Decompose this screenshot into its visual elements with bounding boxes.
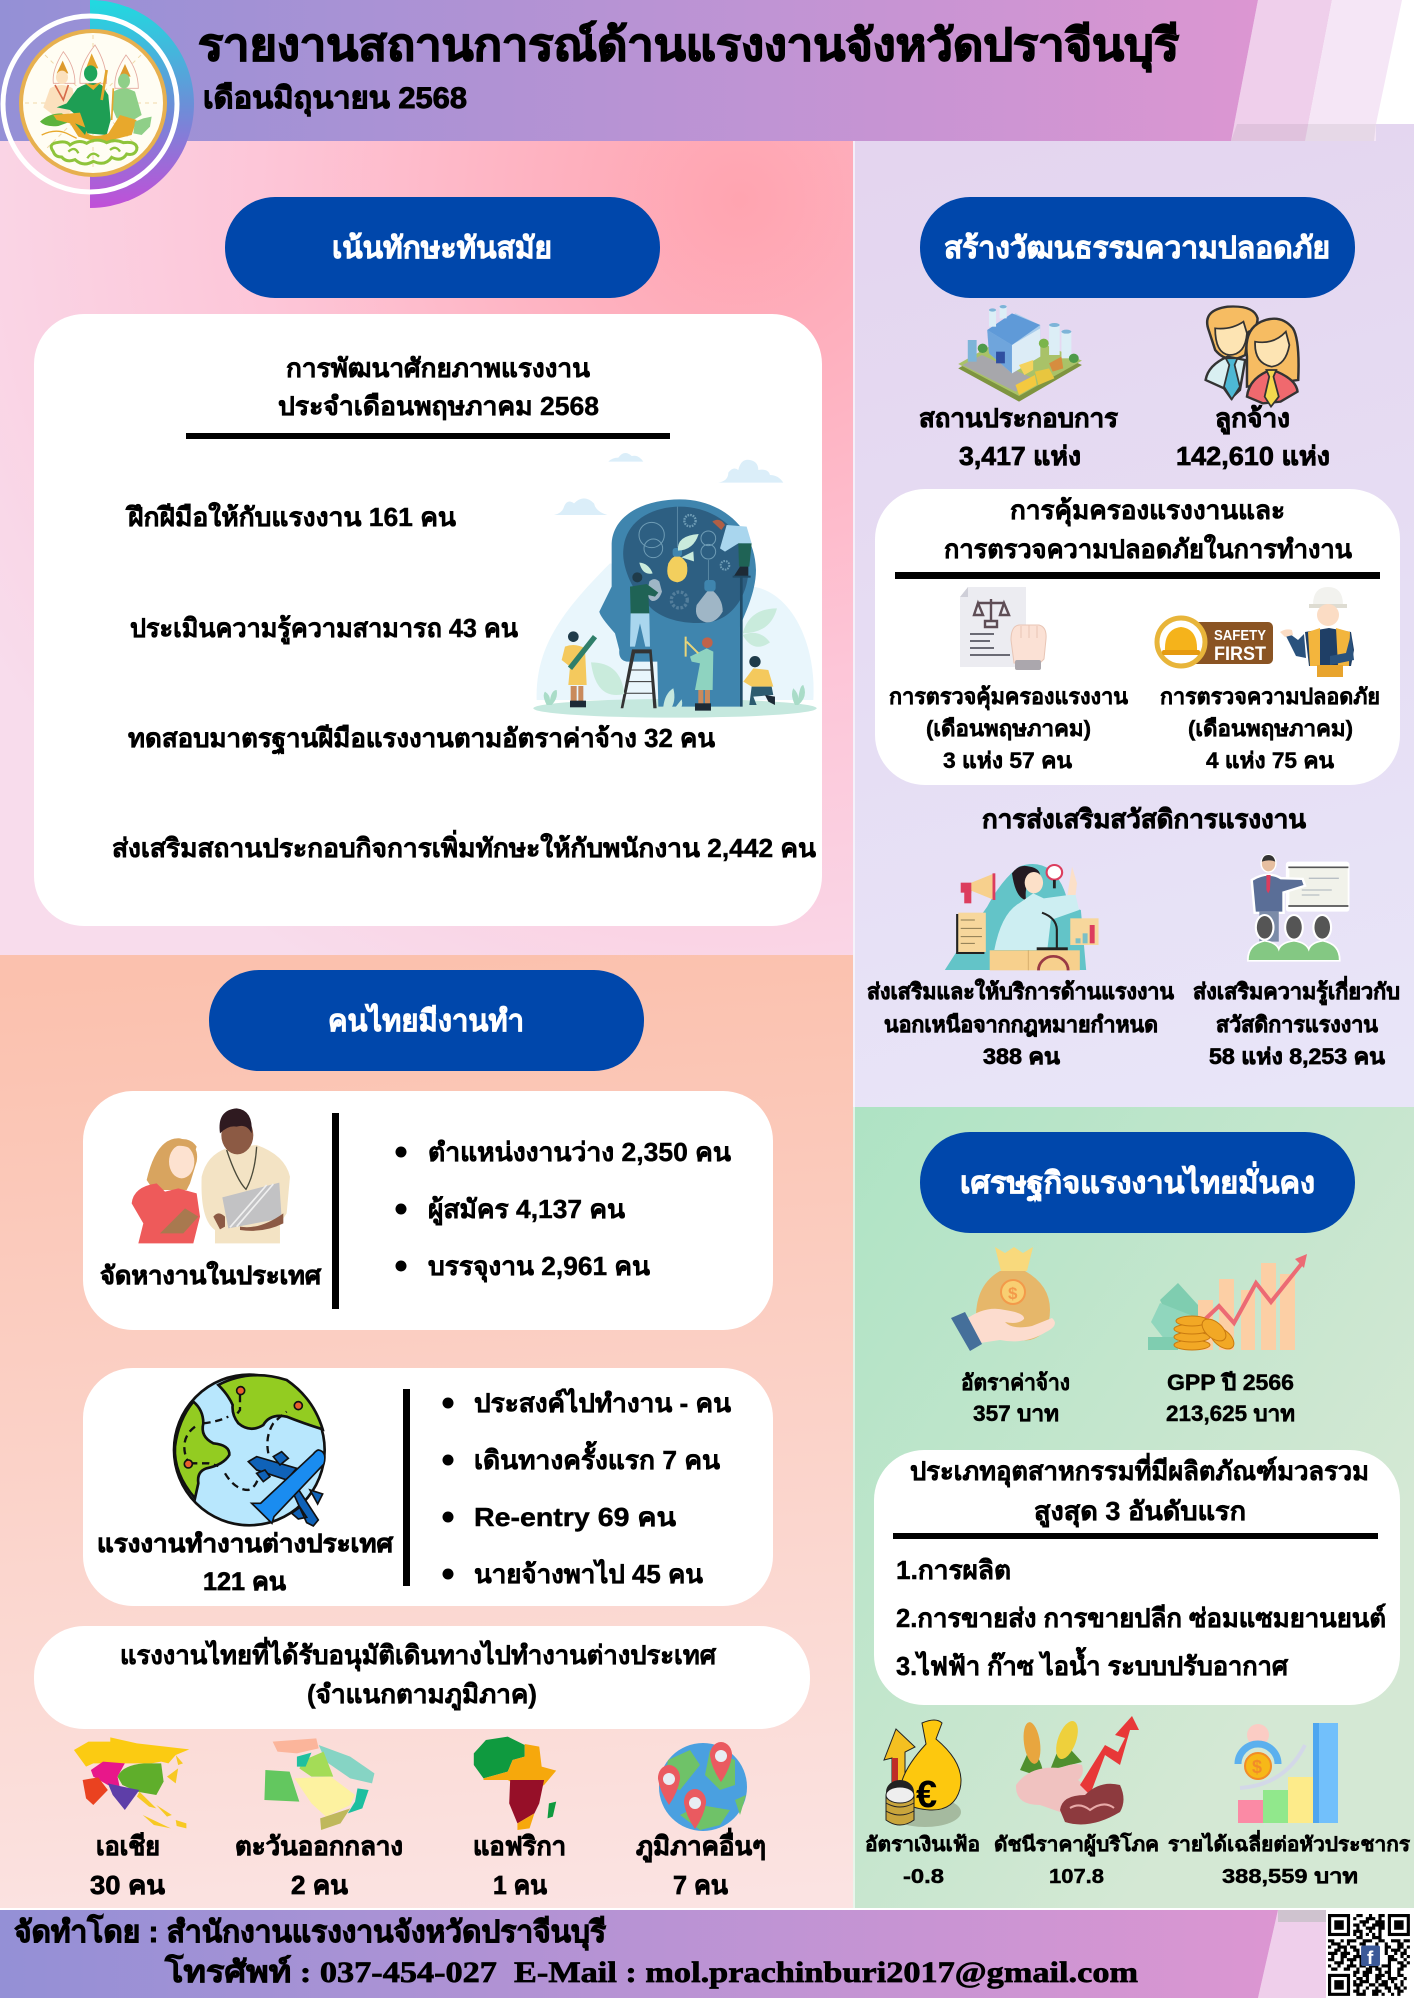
icon: asia map <box>74 1737 189 1828</box>
text: overseas workers label <box>97 1530 394 1596</box>
text: africa count: 1 คน <box>493 1870 547 1900</box>
text: welfare knowledge count: 58 แห่ง 8,253 คน <box>1209 1044 1385 1069</box>
logo emblem <box>3 0 194 208</box>
text: consumer price index: ดัชนีราคาผู้บริโภค <box>994 1832 1159 1858</box>
list: domestic job figures: บรรจุงาน 2,961 คน <box>428 1251 650 1283</box>
text: prepared by: จัดทำโดย : สำนักงานแรงงานจังหวัดปราจีนบุรี <box>14 1913 606 1951</box>
list: top 3 industries: 3.ไฟฟ้า ก๊าซ ไอน้ำ ระบบปรับอากาศ <box>896 1646 1288 1681</box>
text: middle east count: ตะวันออกกลาง <box>235 1831 403 1861</box>
text: consumer price index: 107.8 <box>1049 1866 1104 1888</box>
text: establishments: สถานประกอบการ <box>919 403 1118 433</box>
text: welfare knowledge count: สวัสดิการแรงงาน <box>1216 1012 1378 1037</box>
text: competency assessment: ประเมินความรู้ความสามารถ 43 คน <box>130 613 518 645</box>
text: income per capita: 388,559 บาท <box>1222 1866 1358 1888</box>
text: overseas workers label: 121 คน <box>203 1568 286 1596</box>
QR code: f <box>1367 1948 1374 1969</box>
QR code <box>1328 1916 1410 1994</box>
text: business upskilling: ส่งเสริมสถานประกอบกิจการเพิ่มทักษะให้กับพนักงาน 2,442 คน <box>112 829 816 863</box>
icon: globe with pins <box>658 1742 747 1831</box>
text: other regions count: 7 คน <box>673 1870 728 1900</box>
icon: globe with airplane <box>174 1375 325 1526</box>
text: income per capita <box>1168 1829 1410 1888</box>
panel: approved overseas workers heading: (จำแนกตามภูมิภาค) <box>307 1679 537 1711</box>
text: protection inspection count: การตรวจคุ้มครองแรงงาน <box>889 684 1128 711</box>
text: establishments: 3,417 แห่ง <box>959 441 1081 471</box>
panel: approved overseas workers heading <box>34 1626 810 1729</box>
text: panel heading line 2: ประจำเดือนพฤษภาคม 2568 <box>278 391 599 421</box>
text: wage rate: อัตราค่าจ้าง <box>961 1370 1070 1395</box>
panel: top 3 industries <box>874 1450 1400 1705</box>
text: welfare promotion heading: การส่งเสริมสวัสดิการแรงงาน <box>982 804 1306 834</box>
heading pill: thais employed: คนไทยมีงานทำ <box>328 1003 524 1038</box>
text: safety inspection count: (เดือนพฤษภาคม) <box>1188 716 1353 741</box>
text: employees: ลูกจ้าง <box>1215 403 1290 435</box>
text: protection heading <box>944 495 1352 564</box>
icon: safety worker <box>1280 587 1354 677</box>
icon: middle east map <box>264 1738 374 1830</box>
text: skills training: ฝึกฝีมือให้กับแรงงาน 161 คน <box>125 502 456 532</box>
text: other regions count <box>636 1827 766 1900</box>
text: domestic placement label: จัดหางานในประเทศ <box>100 1260 322 1290</box>
list: overseas figures: ประสงค์ไปทำงาน - คน <box>474 1387 731 1418</box>
text: safety inspection count: การตรวจความปลอดภัย <box>1160 684 1380 709</box>
text: welfare knowledge count: ส่งเสริมความรู้เกี่ยวกับ <box>1193 975 1400 1006</box>
list: domestic job figures: ตำแหน่งงานว่าง 2,350 คน <box>428 1137 731 1167</box>
list: overseas figures: นายจ้างพาไป 45 คน <box>474 1558 703 1589</box>
text: extra services count: ส่งเสริมและให้บริการด้านแรงงาน <box>867 978 1174 1004</box>
footer band <box>0 1908 1414 2000</box>
text: industries heading <box>910 1452 1369 1528</box>
text: establishments <box>919 403 1118 471</box>
text: asia count <box>90 1831 165 1900</box>
panel: skills development <box>34 314 822 926</box>
icon: factory isometric <box>958 305 1082 402</box>
text: skills standard test: ทดสอบมาตรฐานฝีมือแรงงานตามอัตราค่าจ้าง 32 คน <box>128 723 715 756</box>
text: industries heading: ประเภทอุตสาหกรรมที่มีผลิตภัณฑ์มวลรวม <box>910 1452 1369 1488</box>
text: inflation: อัตราเงินเฟ้อ <box>865 1833 980 1856</box>
list: domestic job figures <box>396 1137 731 1283</box>
subtitle: month: เดือนมิถุนายน 2568 <box>203 82 467 117</box>
text: GPP figure: 213,625 บาท <box>1166 1401 1295 1426</box>
text: asia count: 30 คน <box>90 1870 165 1900</box>
panel: overseas workers <box>83 1368 773 1606</box>
icon: safety first sign: SAFETY <box>1214 627 1266 644</box>
icon: two people with laptop <box>132 1108 290 1243</box>
heading pill: safety culture: สร้างวัฒนธรรมความปลอดภัย <box>944 232 1330 265</box>
text: inflation <box>865 1833 980 1888</box>
text: GPP figure <box>1166 1370 1295 1426</box>
icon: inflation euro bag <box>884 1720 961 1827</box>
heading pill: safety culture <box>920 197 1355 298</box>
text: safety inspection count: 4 แห่ง 75 คน <box>1206 748 1334 773</box>
icon: law document with fist <box>960 587 1046 670</box>
icon: safety first sign <box>1157 618 1273 666</box>
list: overseas figures: Re-entry 69 คน <box>474 1502 676 1532</box>
list: overseas figures: เดินทางครั้งแรก 7 คน <box>474 1440 720 1475</box>
heading pill: modern skills: เน้นทักษะทันสมัย <box>332 232 552 265</box>
text: extra services count <box>867 978 1174 1069</box>
heading pill: labour economy <box>920 1132 1355 1233</box>
list: top 3 industries <box>896 1555 1386 1681</box>
icon: food prices with arrow <box>1016 1716 1139 1824</box>
list: top 3 industries: 2.การขายส่ง การขายปลีก ซ่อมแซมยานยนต์ <box>896 1603 1386 1633</box>
text: contact: โทรศัพท์ : 037-454-027 E-Mail : mol.prachinburi2017@gmail.com <box>164 1953 1138 1989</box>
title: รายงานสถานการณ์ด้านแรงงานจังหวัดปราจีนบุรี <box>198 20 1179 73</box>
icon: money bag in hand <box>951 1247 1055 1351</box>
icon: money bag in hand: $ <box>1008 1284 1018 1303</box>
icon: presenter with audience <box>1249 855 1349 960</box>
text: africa count: แอฟริกา <box>473 1831 566 1861</box>
icon: safety first sign: FIRST <box>1214 644 1266 665</box>
text: protection inspection count: 3 แห่ง 57 คน <box>943 748 1072 773</box>
icon: income bar chart <box>1238 1723 1338 1823</box>
text: wage rate <box>961 1370 1070 1426</box>
text: asia count: เอเชีย <box>96 1831 160 1861</box>
text: welfare knowledge count <box>1193 975 1400 1069</box>
illustration: head with workers <box>533 453 817 718</box>
heading pill: labour economy: เศรษฐกิจแรงงานไทยมั่นคง <box>960 1161 1315 1203</box>
list: domestic job figures: ผู้สมัคร 4,137 คน <box>428 1194 625 1226</box>
icon: africa map <box>474 1737 556 1830</box>
icon: income bar chart: $ <box>1252 1757 1262 1777</box>
text: consumer price index <box>994 1832 1159 1888</box>
icon: GPP growth chart <box>1148 1254 1307 1353</box>
panel: approved overseas workers heading: แรงงานไทยที่ได้รับอนุมัติเดินทางไปทำงานต่างประเทศ <box>120 1636 716 1672</box>
text: wage rate: 357 บาท <box>973 1401 1059 1426</box>
list: top 3 industries: 1.การผลิต <box>896 1555 1011 1585</box>
text: protection inspection count <box>889 684 1128 773</box>
text: safety inspection count <box>1160 684 1380 773</box>
text: other regions count: ภูมิภาคอื่นๆ <box>636 1827 766 1863</box>
text: GPP figure: GPP ปี 2566 <box>1167 1370 1294 1395</box>
text: extra services count: นอกเหนือจากกฎหมายกำหนด <box>884 1012 1158 1037</box>
text: employees: 142,610 แห่ง <box>1176 441 1330 471</box>
text: panel heading line 1: การพัฒนาศักยภาพแรงงาน <box>286 353 590 383</box>
heading pill: modern skills <box>225 197 660 298</box>
text: extra services count: 388 คน <box>983 1044 1060 1069</box>
text: inflation: -0.8 <box>903 1866 944 1888</box>
text: middle east count <box>235 1831 403 1900</box>
header band <box>0 0 1402 141</box>
icon: inflation euro bag: € <box>916 1774 937 1816</box>
text: protection heading: การคุ้มครองแรงงานและ <box>1010 495 1285 527</box>
text: industries heading: สูงสุด 3 อันดับแรก <box>1034 1496 1246 1528</box>
list: overseas figures <box>442 1387 731 1589</box>
text: protection inspection count: (เดือนพฤษภาคม) <box>926 716 1091 741</box>
text: middle east count: 2 คน <box>291 1870 348 1900</box>
icon: employees couple <box>1206 306 1299 407</box>
text: africa count <box>473 1831 566 1900</box>
text: employees <box>1176 403 1330 471</box>
panel: labour protection and safety inspection <box>875 489 1400 785</box>
heading pill: thais employed <box>209 970 644 1071</box>
panel: domestic job placement <box>83 1091 773 1330</box>
text: protection heading: การตรวจความปลอดภัยในการทำงาน <box>944 534 1352 564</box>
text: income per capita: รายได้เฉลี่ยต่อหัวประชากร <box>1168 1829 1410 1856</box>
text: overseas workers label: แรงงานทำงานต่างประเทศ <box>97 1530 394 1558</box>
icon: woman with megaphone at podium <box>945 864 1099 970</box>
